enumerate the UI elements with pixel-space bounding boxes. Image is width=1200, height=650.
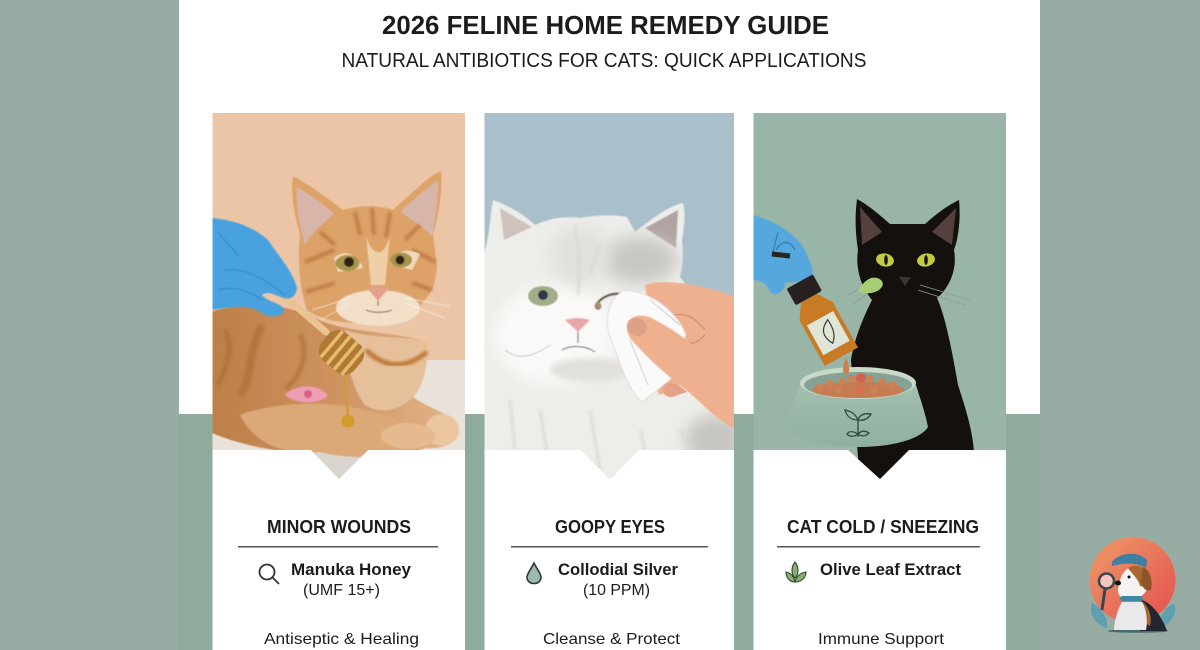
icon: water drop [527, 563, 541, 584]
bowl [787, 357, 928, 447]
benefit: Antiseptic & Healing [264, 631, 419, 648]
heading: CAT COLD / SNEEZING [787, 517, 979, 537]
remedy strength: (UMF 15+) [303, 582, 380, 599]
remedy name: Manuka Honey [291, 560, 412, 579]
blue glove [753, 215, 813, 294]
title: 2026 FELINE HOME REMEDY GUIDE [382, 10, 829, 40]
logo: beagle detective [1090, 537, 1176, 633]
cat fur [484, 200, 745, 485]
remedy name: Collodial Silver [558, 560, 678, 579]
honey dipper [280, 296, 364, 428]
thumb [627, 316, 734, 428]
cat body [212, 305, 459, 457]
heading: GOOPY EYES [555, 517, 665, 537]
card: goopy eyes text [511, 517, 708, 648]
white header panel [179, 0, 1040, 414]
hand back fingers [645, 282, 734, 428]
black cat [848, 199, 974, 485]
panel: minor wounds card [212, 113, 465, 650]
benefit: Cleanse & Protect [543, 631, 681, 648]
card: cat cold text [777, 517, 980, 648]
subtitle: NATURAL ANTIBIOTICS FOR CATS: QUICK APPLICATIONS [342, 50, 866, 72]
icon: magnifier [260, 564, 279, 584]
blue glove [212, 218, 297, 316]
panel: cat cold card [753, 113, 1006, 650]
dropper bottle [783, 272, 858, 366]
illustration: black cat with olive leaf drops [753, 113, 1006, 485]
photo: white cat being wiped [484, 113, 745, 485]
cat head [292, 171, 450, 326]
lower sage band [179, 414, 1040, 650]
card: minor wounds text [238, 517, 438, 648]
remedy name: Olive Leaf Extract [820, 560, 961, 579]
heading: MINOR WOUNDS [267, 517, 411, 537]
icon: leaf sprig [786, 562, 806, 582]
photo: orange tabby with honey dipper [212, 113, 465, 485]
tissue [607, 291, 686, 402]
remedy strength: (10 PPM) [583, 582, 650, 599]
panel: goopy eyes card [484, 113, 745, 650]
benefit: Immune Support [818, 631, 945, 648]
